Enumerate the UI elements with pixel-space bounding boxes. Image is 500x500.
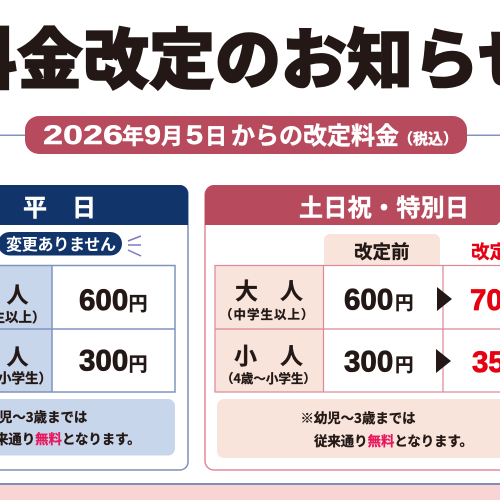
date banner: 年 (122, 119, 144, 151)
date banner: 5 (186, 120, 203, 150)
adult row: （中学生以上） (220, 304, 315, 323)
weekend note (217, 399, 500, 458)
child row: 小 (234, 337, 257, 371)
date banner: （税込） (398, 128, 458, 149)
child row: 人 (280, 337, 303, 371)
child row: 300 (79, 344, 128, 378)
weekend note: ※幼児〜3歳までは (300, 407, 416, 427)
before-revision column heading (324, 234, 440, 265)
weekday note: 児〜3歳までは (0, 406, 87, 426)
weekday price table (0, 266, 175, 392)
adult row: 大 (235, 272, 258, 306)
child row: 人 (6, 340, 29, 372)
weekend price table (215, 266, 500, 392)
weekend header: 土日祝・特別日 (299, 188, 469, 223)
weekday header: 平 (23, 188, 47, 223)
date banner (0, 116, 500, 154)
child row (221, 337, 500, 387)
bottom band (0, 483, 500, 500)
adult row: 600 (79, 284, 128, 317)
weekend note: 従来通り無料となります。 (314, 430, 473, 450)
child row: 円 (128, 350, 148, 376)
adult row: 人 (6, 278, 29, 310)
arrow (436, 349, 451, 373)
panel: weekend and holidays (205, 185, 500, 470)
date banner: 月 (161, 119, 183, 151)
adult row (220, 272, 500, 323)
arrow (437, 287, 452, 311)
date banner: 2026 (43, 120, 123, 150)
child row: （4歳〜小学生） (221, 368, 316, 387)
date banner: 日 (205, 119, 227, 151)
child row: 円 (395, 352, 414, 378)
no change badge: 変更ありません (6, 231, 116, 255)
child row: 300 (344, 346, 393, 378)
weekday header (0, 185, 188, 225)
panel: weekday (0, 185, 188, 470)
date banner: からの改定料金 (231, 116, 399, 151)
adult row: 600 (344, 284, 393, 316)
weekend header (205, 185, 500, 226)
weekday header: 日 (72, 188, 96, 223)
adult row: 人 (280, 272, 303, 306)
date banner: 9 (144, 120, 161, 150)
child row (0, 340, 148, 387)
weekday note (0, 399, 175, 456)
icon: emphasis rays (128, 236, 141, 256)
adult row (0, 278, 148, 326)
before-revision column heading: 改定前 (354, 238, 410, 264)
adult row: 円 (128, 289, 148, 316)
adult row: 円 (395, 290, 414, 316)
